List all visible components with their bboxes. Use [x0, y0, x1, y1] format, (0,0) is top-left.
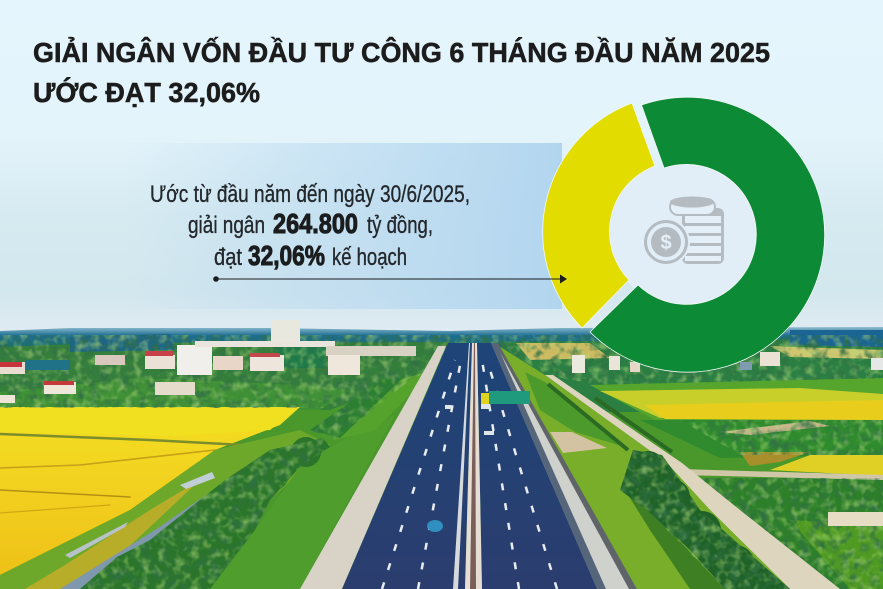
- background: sky: [0, 0, 883, 332]
- text panel background: [125, 143, 562, 309]
- median: [465, 343, 482, 589]
- left embankment lawn: [210, 415, 395, 589]
- right distant fields: [500, 338, 883, 412]
- callout text: giải ngân: [188, 212, 265, 239]
- houses: [0, 320, 883, 526]
- title: ƯỚC ĐẠT 32,06%: [33, 77, 260, 108]
- diagonal farm road: [545, 375, 840, 589]
- dirt patch: [550, 432, 607, 453]
- callout text: [150, 181, 470, 271]
- lawn shadow near trees: [625, 490, 725, 589]
- title: GIẢI NGÂN VỐN ĐẦU TƯ CÔNG 6 THÁNG ĐẦU NĂM 2025: [33, 36, 770, 68]
- highway: [300, 343, 637, 589]
- right tree clump: [620, 450, 790, 589]
- canal: [60, 482, 228, 589]
- callout text: đạt: [214, 244, 242, 271]
- callout text: 264.800: [273, 208, 358, 239]
- callout text: Ước từ đầu năm đến ngày 30/6/2025,: [150, 181, 470, 208]
- callout text: tỷ đồng,: [367, 212, 433, 239]
- right embankment lawn: [497, 345, 790, 589]
- lane markings: [382, 360, 557, 589]
- road sign: [481, 391, 530, 404]
- icon: coins: [642, 196, 724, 266]
- left green strip along canal: [0, 430, 330, 589]
- background: landscape photo: [0, 320, 883, 589]
- base ground: [0, 338, 883, 589]
- callout text: kế hoạch: [332, 244, 407, 271]
- segment: yellow, 32.06 percent: [543, 103, 655, 328]
- left village belt: [0, 342, 450, 410]
- distant tree line: [0, 327, 883, 352]
- carriageways: [342, 343, 472, 589]
- upper tree strip: [310, 376, 405, 438]
- donut chart: [543, 97, 825, 372]
- left rice fields: [0, 407, 300, 575]
- foliage mottling: [0, 330, 883, 589]
- donut centre disc: [610, 160, 758, 308]
- left tree strip: [80, 437, 330, 589]
- segment: green, remaining plan: [590, 97, 825, 372]
- icon: coins: $: [660, 232, 672, 254]
- title: [33, 36, 770, 108]
- hedges along farm road: [548, 384, 672, 452]
- cars: [481, 404, 490, 409]
- right bottom crops: [690, 478, 883, 589]
- callout text: 32,06%: [248, 240, 325, 271]
- pointer arrow: [213, 274, 567, 284]
- shoulders: [300, 346, 446, 589]
- right mid crops: [640, 420, 883, 458]
- field dividers: [0, 434, 280, 513]
- right top field: [590, 378, 883, 424]
- cross lane: [680, 469, 883, 480]
